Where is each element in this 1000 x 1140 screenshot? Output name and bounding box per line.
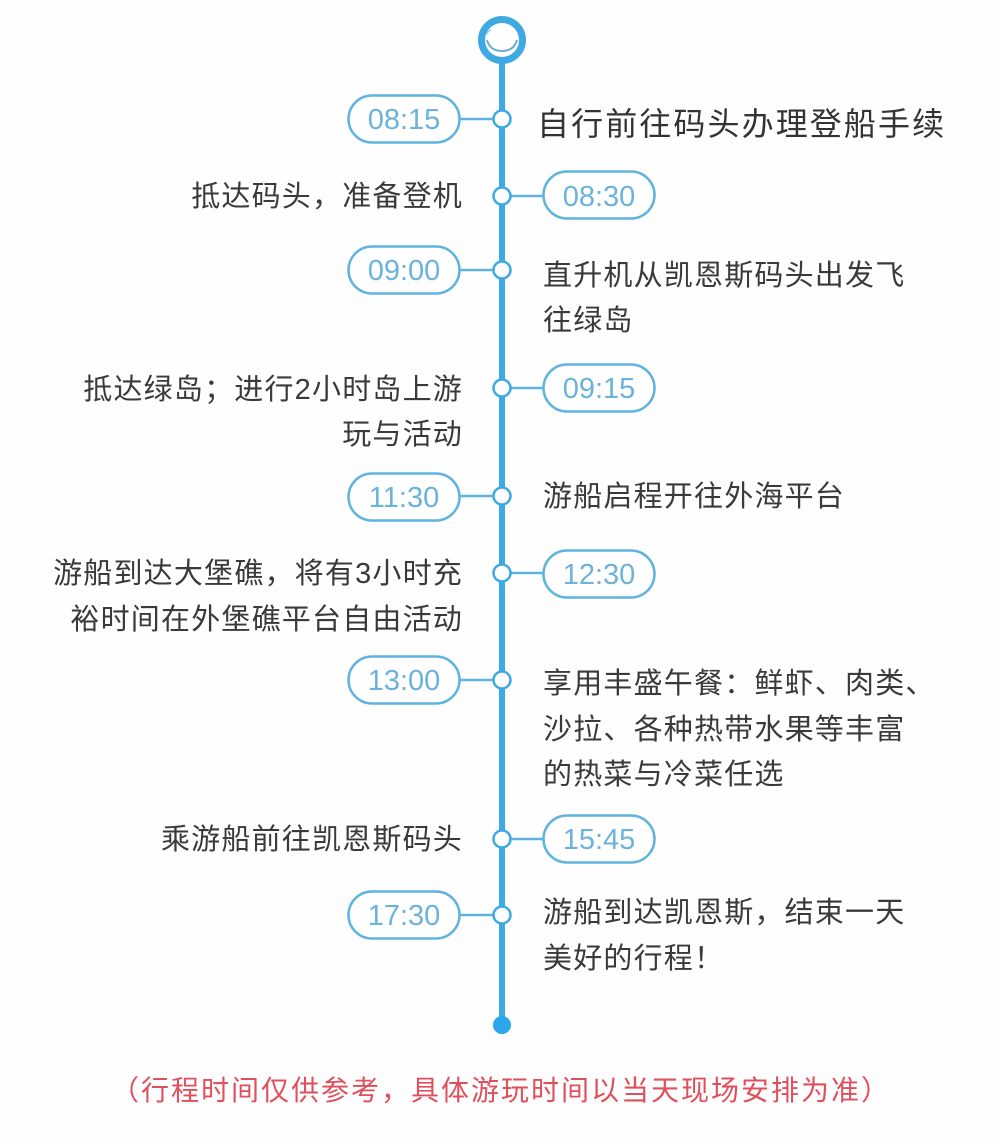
step 15:45 [161,816,654,862]
step 12:30 [53,550,654,636]
step 11:30: 11:30 [369,482,439,514]
step 09:00: 直升机从凯恩斯码头出发飞 [543,259,905,292]
step 08:30: 08:30 [563,181,635,213]
step 13:00: 13:00 [368,665,440,697]
timeline end dot [493,1016,511,1034]
step 09:00: 09:00 [368,255,440,287]
step 09:15: 09:15 [563,373,635,405]
step 17:30 [348,892,905,975]
step 09:15 [83,364,654,451]
step 17:30: 游船到达凯恩斯，结束一天 [543,896,905,929]
timeline spine [499,55,505,1025]
step 13:00: 的热菜与冷菜任选 [543,758,785,791]
step 13:00: 享用丰盛午餐：鲜虾、肉类、 [543,667,936,700]
icon: smiling start circle [482,20,522,60]
step 08:30 [191,172,654,218]
step 08:15 [348,96,946,142]
step 15:45: 15:45 [563,824,635,856]
step 09:00: 往绿岛 [543,304,634,337]
step 08:15: 08:15 [368,104,440,136]
step 08:30: 抵达码头，准备登机 [191,180,463,213]
step 08:15: 自行前往码头办理登船手续 [537,106,946,142]
step 09:15: 玩与活动 [342,418,463,451]
step 17:30: 17:30 [368,900,440,932]
step 15:45: 乘游船前往凯恩斯码头 [161,823,463,856]
step 13:00 [348,656,936,791]
step 11:30: 游船启程开往外海平台 [543,480,845,513]
step 12:30: 游船到达大堡礁，将有3小时充 [53,557,463,590]
step 12:30: 裕时间在外堡礁平台自由活动 [70,603,463,636]
step 09:00 [348,246,905,337]
step 12:30: 12:30 [563,559,635,591]
step 17:30: 美好的行程！ [543,942,724,975]
step 11:30 [348,474,845,520]
step 09:15: 抵达绿岛；进行2小时岛上游 [83,373,463,406]
disclaimer note: （行程时间仅供参考，具体游玩时间以当天现场安排为准） [111,1075,891,1106]
step 13:00: 沙拉、各种热带水果等丰富 [543,713,905,746]
